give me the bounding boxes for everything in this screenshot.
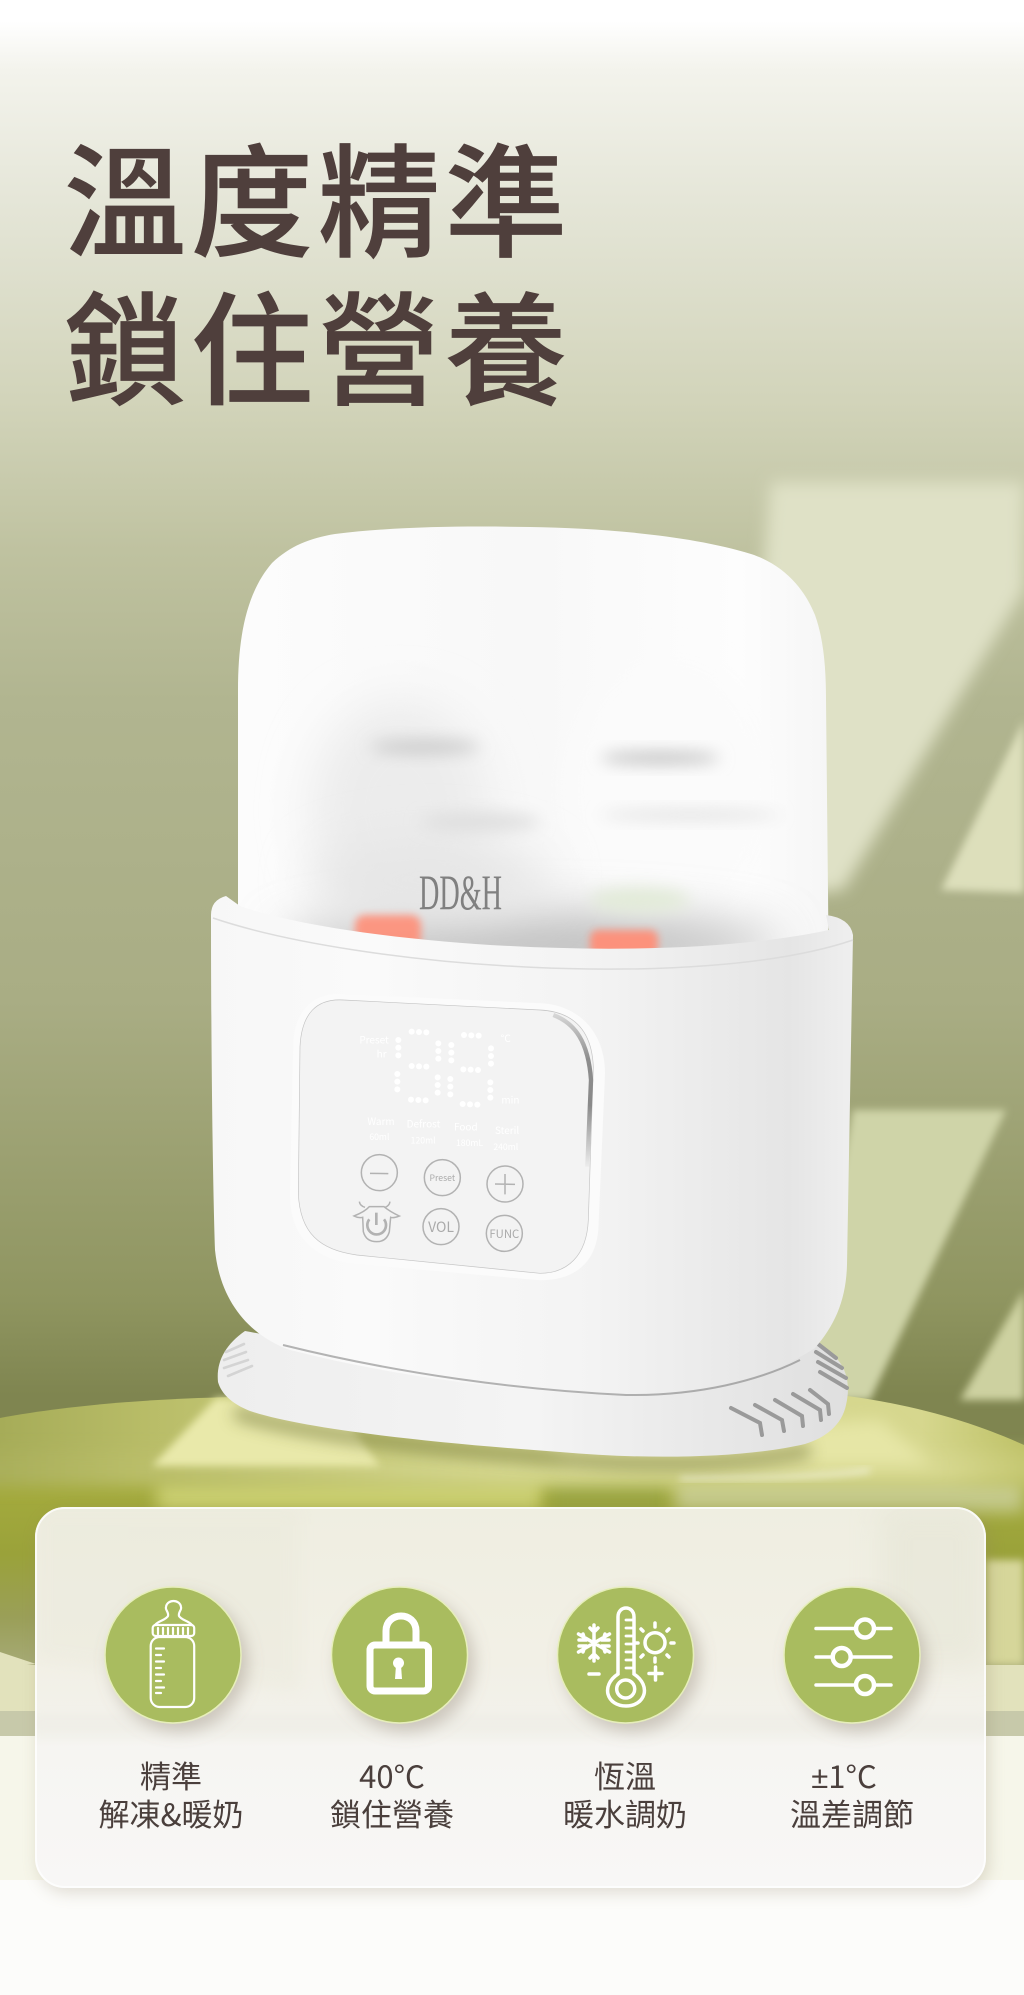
feature label: ±1°C 溫差調節: 溫差調節 [790,1790,914,1835]
background: diagonal light shafts [735,482,1024,1400]
title: 鎖住營養 [64,254,572,431]
LED digits [394,1029,494,1108]
vents: base plate left [224,1344,252,1376]
LED labels [359,1030,519,1153]
product: base plate [218,1331,848,1463]
feature label: 精準 解凍&暖奶: 解凍&暖奶 [98,1790,244,1835]
product: lower body with rim [211,896,853,1396]
pedestal: top surface [0,1395,1024,1486]
LED labels: 120ml [411,1134,436,1146]
panel buttons [354,1155,523,1251]
feature label: 精準 解凍&暖奶: 精準 [140,1752,202,1797]
LED labels: Warm [367,1113,395,1128]
control panel [290,994,605,1280]
LED labels: 180mL [456,1137,483,1149]
control panel: Preset [430,1172,456,1184]
title [64,106,572,431]
feature label: ±1°C 溫差調節: ±1°C [811,1752,877,1797]
icon: sliders [784,1587,920,1723]
feature label: 精準 解凍&暖奶 [98,1752,244,1835]
LED labels: Steril [495,1122,519,1137]
dome: blurred bottles inside [284,709,784,949]
icon: thermometer, snowflake, sun [558,1587,694,1723]
control panel: VOL [428,1217,454,1237]
panel: feature card [35,1507,989,1893]
feature label: 40°C 鎖住營養: 40°C [359,1752,425,1797]
LED labels: Preset [359,1031,389,1046]
vents: base plate right [731,1344,847,1435]
title: 溫度精準 [64,106,572,283]
LED labels: min [501,1091,519,1106]
LED labels: Defrost [407,1116,441,1131]
LED labels: Food [454,1119,478,1134]
feature label: ±1°C 溫差調節 [790,1752,914,1835]
LED labels: 60ml [369,1131,390,1143]
feature label: 40°C 鎖住營養 [330,1752,454,1835]
background: olive gradient wall [0,0,1024,1500]
feature label: 恆溫 暖水調奶: 暖水調奶 [563,1790,687,1835]
pedestal: cylinder side [0,1460,1024,1995]
LED labels: °C [501,1030,511,1045]
logo: D&H: DD&H [419,864,502,920]
LED labels: hr [377,1046,387,1061]
icon: baby bottle [105,1587,241,1723]
icon: padlock [332,1587,468,1723]
feature label: 40°C 鎖住營養: 鎖住營養 [330,1790,454,1835]
product: translucent dome lid [238,527,829,990]
LED labels: 240ml [493,1141,519,1153]
feature label: 恆溫 暖水調奶: 恆溫 [594,1752,656,1797]
control panel: FUNC [489,1226,519,1242]
feature label: 恆溫 暖水調奶 [563,1752,687,1835]
